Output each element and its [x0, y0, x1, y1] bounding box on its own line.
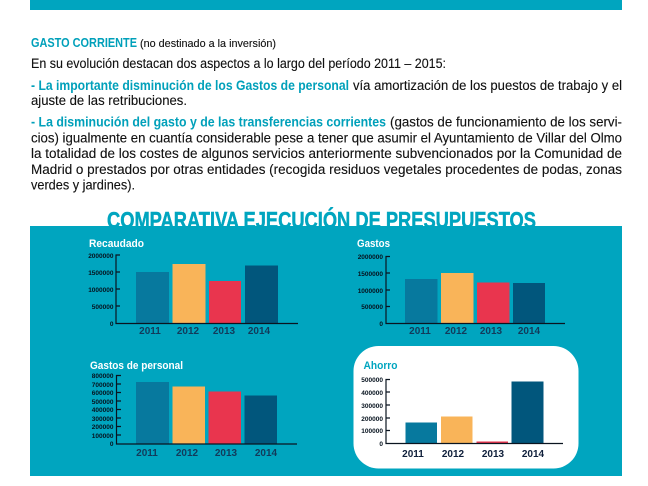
chart: recaudado: 2014	[248, 326, 271, 337]
chart: gastos: 2014	[518, 326, 541, 337]
section heading: gasto corriente	[31, 36, 276, 50]
chart: gastos de personal: 0	[110, 441, 114, 448]
chart: ahorro (white card): 200000	[361, 416, 383, 423]
chart: gastos de personal: 400000	[92, 407, 114, 414]
paragraph: gastos de personal	[31, 78, 622, 108]
chart: gastos de personal: 600000	[92, 390, 114, 397]
chart: ahorro (white card): 2012	[442, 449, 465, 460]
section heading: gasto corriente: (no destinado a la inversión)	[140, 38, 276, 50]
chart: gastos: 500000	[361, 304, 383, 311]
paragraph: transferencias corrientes: la totalidad de los costes de algunos servicios anteriormente subvencionados por la Comunidad de	[31, 146, 622, 161]
paragraph: gastos de personal: vía amortización de los puestos de trabajo y el	[353, 78, 622, 93]
top teal band	[30, 0, 622, 10]
chart: gastos: 0	[379, 321, 383, 328]
teal chart panel	[30, 226, 622, 476]
chart: gastos: Gastos	[357, 238, 390, 250]
chart: ahorro (white card): Ahorro	[364, 360, 398, 372]
chart: recaudado: 2000000	[88, 253, 114, 260]
intro sentence: En su evolución destacan dos aspectos a lo largo del período 2011 – 2015:	[31, 56, 446, 71]
paragraph: gastos de personal: - La importante disminución de los Gastos de personal	[31, 78, 349, 93]
chart: gastos de personal: 500000	[92, 399, 114, 406]
section heading: gasto corriente: GASTO CORRIENTE	[31, 36, 137, 50]
chart: recaudado: 2012	[177, 326, 200, 337]
chart: recaudado: 500000	[92, 304, 114, 311]
chart: gastos: 2012	[445, 326, 468, 337]
chart: recaudado: 2013	[213, 326, 236, 337]
chart: gastos de personal: 100000	[92, 433, 114, 440]
paragraph: transferencias corrientes: (gastos de funcionamiento de los servi-	[390, 114, 622, 130]
chart: gastos de personal	[90, 360, 297, 459]
chart: ahorro (white card)	[354, 346, 578, 468]
chart: recaudado: 2011	[139, 326, 161, 337]
chart: gastos de personal: Gastos de personal	[90, 360, 183, 372]
chart: recaudado: 1500000	[88, 270, 114, 277]
chart: gastos: 1500000	[358, 271, 383, 278]
chart: gastos de personal: 200000	[92, 424, 114, 431]
paragraph: transferencias corrientes	[31, 114, 622, 192]
chart: gastos de personal: 300000	[92, 416, 114, 423]
paragraph: gastos de personal: ajuste de las retribuciones.	[31, 93, 187, 108]
paragraph: transferencias corrientes: verdes y jardines).	[31, 178, 135, 192]
chart: ahorro (white card): 400000	[361, 390, 383, 397]
paragraph: transferencias corrientes: - La disminución del gasto y de las transferencias corrientes	[31, 114, 386, 130]
paragraph: transferencias corrientes: Madrid o prestados por otras entidades (recogida residuos vegetales procedentes de podas, zonas	[31, 162, 622, 177]
paragraph: transferencias corrientes: cios) igualmente en cuantía considerable pese a tener que asumir el Ayuntamiento de Villar del Olmo	[31, 130, 622, 146]
chart: gastos de personal: 2014	[255, 448, 278, 459]
chart: gastos de personal: 2012	[176, 448, 199, 459]
chart: gastos de personal: 700000	[92, 382, 114, 389]
chart: recaudado: 1000000	[88, 287, 114, 294]
chart: ahorro (white card): 2011	[402, 449, 424, 460]
chart: gastos de personal: 2013	[215, 448, 238, 459]
chart: gastos de personal: 2011	[136, 448, 158, 459]
chart: ahorro (white card): 500000	[361, 377, 383, 384]
chart: gastos: 1000000	[358, 288, 383, 295]
chart: ahorro (white card): 2014	[522, 449, 545, 460]
chart: gastos de personal: 800000	[92, 373, 114, 380]
chart: gastos: 2013	[480, 326, 503, 337]
chart: ahorro (white card): 0	[379, 441, 383, 448]
chart: recaudado: Recaudado	[89, 238, 144, 250]
chart: ahorro (white card): 300000	[361, 403, 383, 410]
chart: ahorro (white card): 100000	[361, 428, 383, 435]
chart: ahorro (white card): 2013	[482, 449, 505, 460]
chart: recaudado	[88, 238, 298, 337]
chart: gastos: 2011	[409, 326, 431, 337]
chart: recaudado: 0	[110, 321, 114, 328]
chart: gastos	[357, 238, 565, 337]
main title: COMPARATIVA EJECUCIÓN DE PRESUPUESTOS	[107, 206, 536, 233]
chart: gastos: 2000000	[358, 254, 383, 261]
